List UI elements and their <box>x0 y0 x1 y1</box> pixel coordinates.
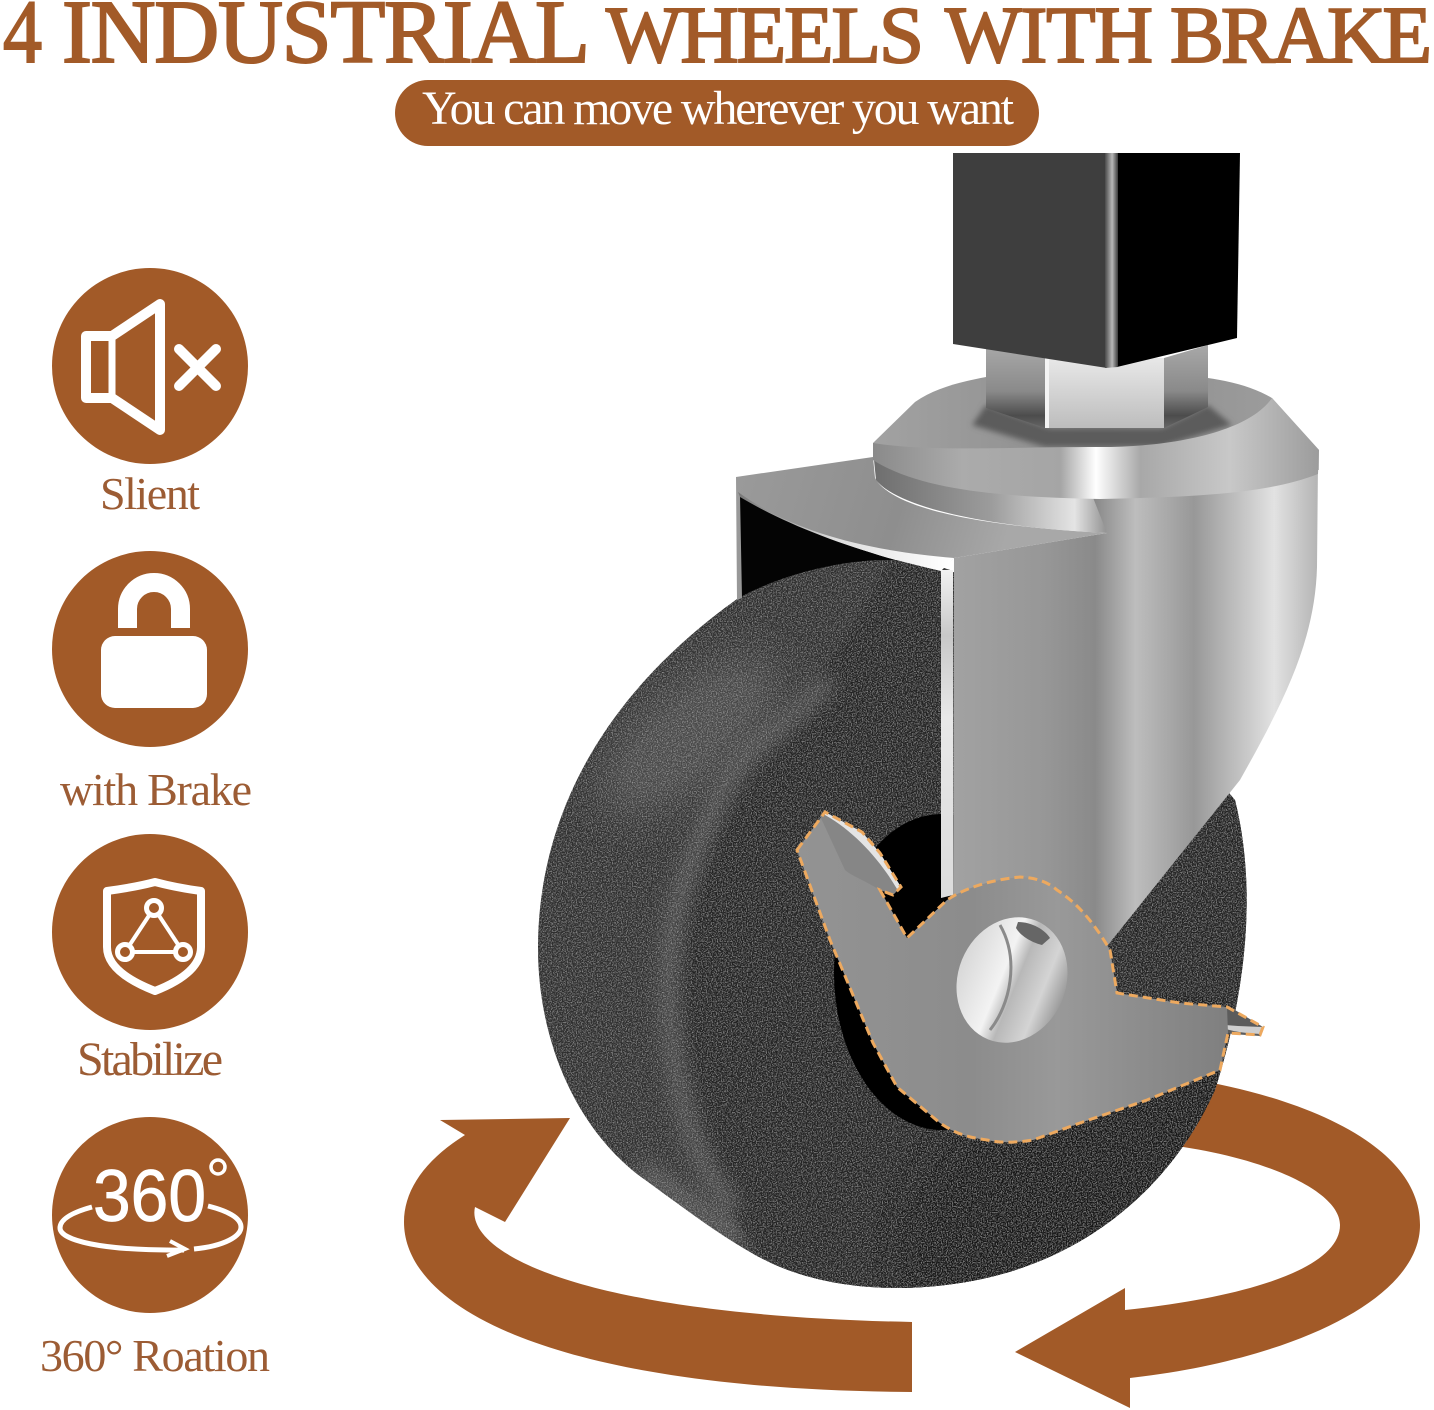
fork side body <box>953 462 1318 945</box>
fork top plate <box>736 457 1107 600</box>
arrow: rotation right <box>1015 1079 1420 1408</box>
icon: 360 degree <box>52 1117 248 1313</box>
upper lobe sheen <box>592 646 788 824</box>
label: with Brake: with Brake <box>60 764 252 815</box>
fork interior <box>740 495 941 650</box>
icon: padlock <box>52 551 248 747</box>
front face <box>682 560 1247 1288</box>
brake front tab <box>820 812 901 895</box>
plate edge highlight <box>738 492 954 571</box>
square black tube <box>953 153 1240 368</box>
label: 360 Roation: 360° Roation <box>40 1330 270 1381</box>
label: Stabilize: Stabilize <box>77 1033 223 1086</box>
wheel tire <box>538 560 1247 1288</box>
fork inner edge highlight <box>941 570 953 898</box>
axle pin <box>938 900 1086 1060</box>
dashed outline <box>797 812 1263 1142</box>
lower lobe sheen <box>640 1170 740 1240</box>
icon: shield with triangle <box>52 834 248 1030</box>
swivel collar <box>873 377 1319 499</box>
label: Slient: Slient <box>100 468 200 519</box>
shadow at lower right <box>886 1035 1230 1288</box>
feature: silent <box>52 268 248 519</box>
title <box>3 0 1432 82</box>
brake rear tab <box>1205 1007 1263 1036</box>
brake plate <box>797 812 1228 1142</box>
subtitle pill: You can move wherever you want <box>422 82 1015 135</box>
wheel hub recess <box>834 814 1050 1130</box>
feature: rotation <box>40 1117 270 1381</box>
icon: 360 degree: 360 <box>93 1156 206 1237</box>
ridge highlight <box>670 680 830 1210</box>
arrow: rotation left <box>404 1118 912 1392</box>
brake lever <box>797 812 1263 1142</box>
icon: muted speaker <box>52 268 248 464</box>
feature: brake <box>52 551 252 815</box>
collar fillet <box>873 450 1107 533</box>
feature: stabilize <box>52 834 248 1086</box>
hex neck <box>986 345 1208 428</box>
caster wheel product illustration <box>520 153 1319 1381</box>
